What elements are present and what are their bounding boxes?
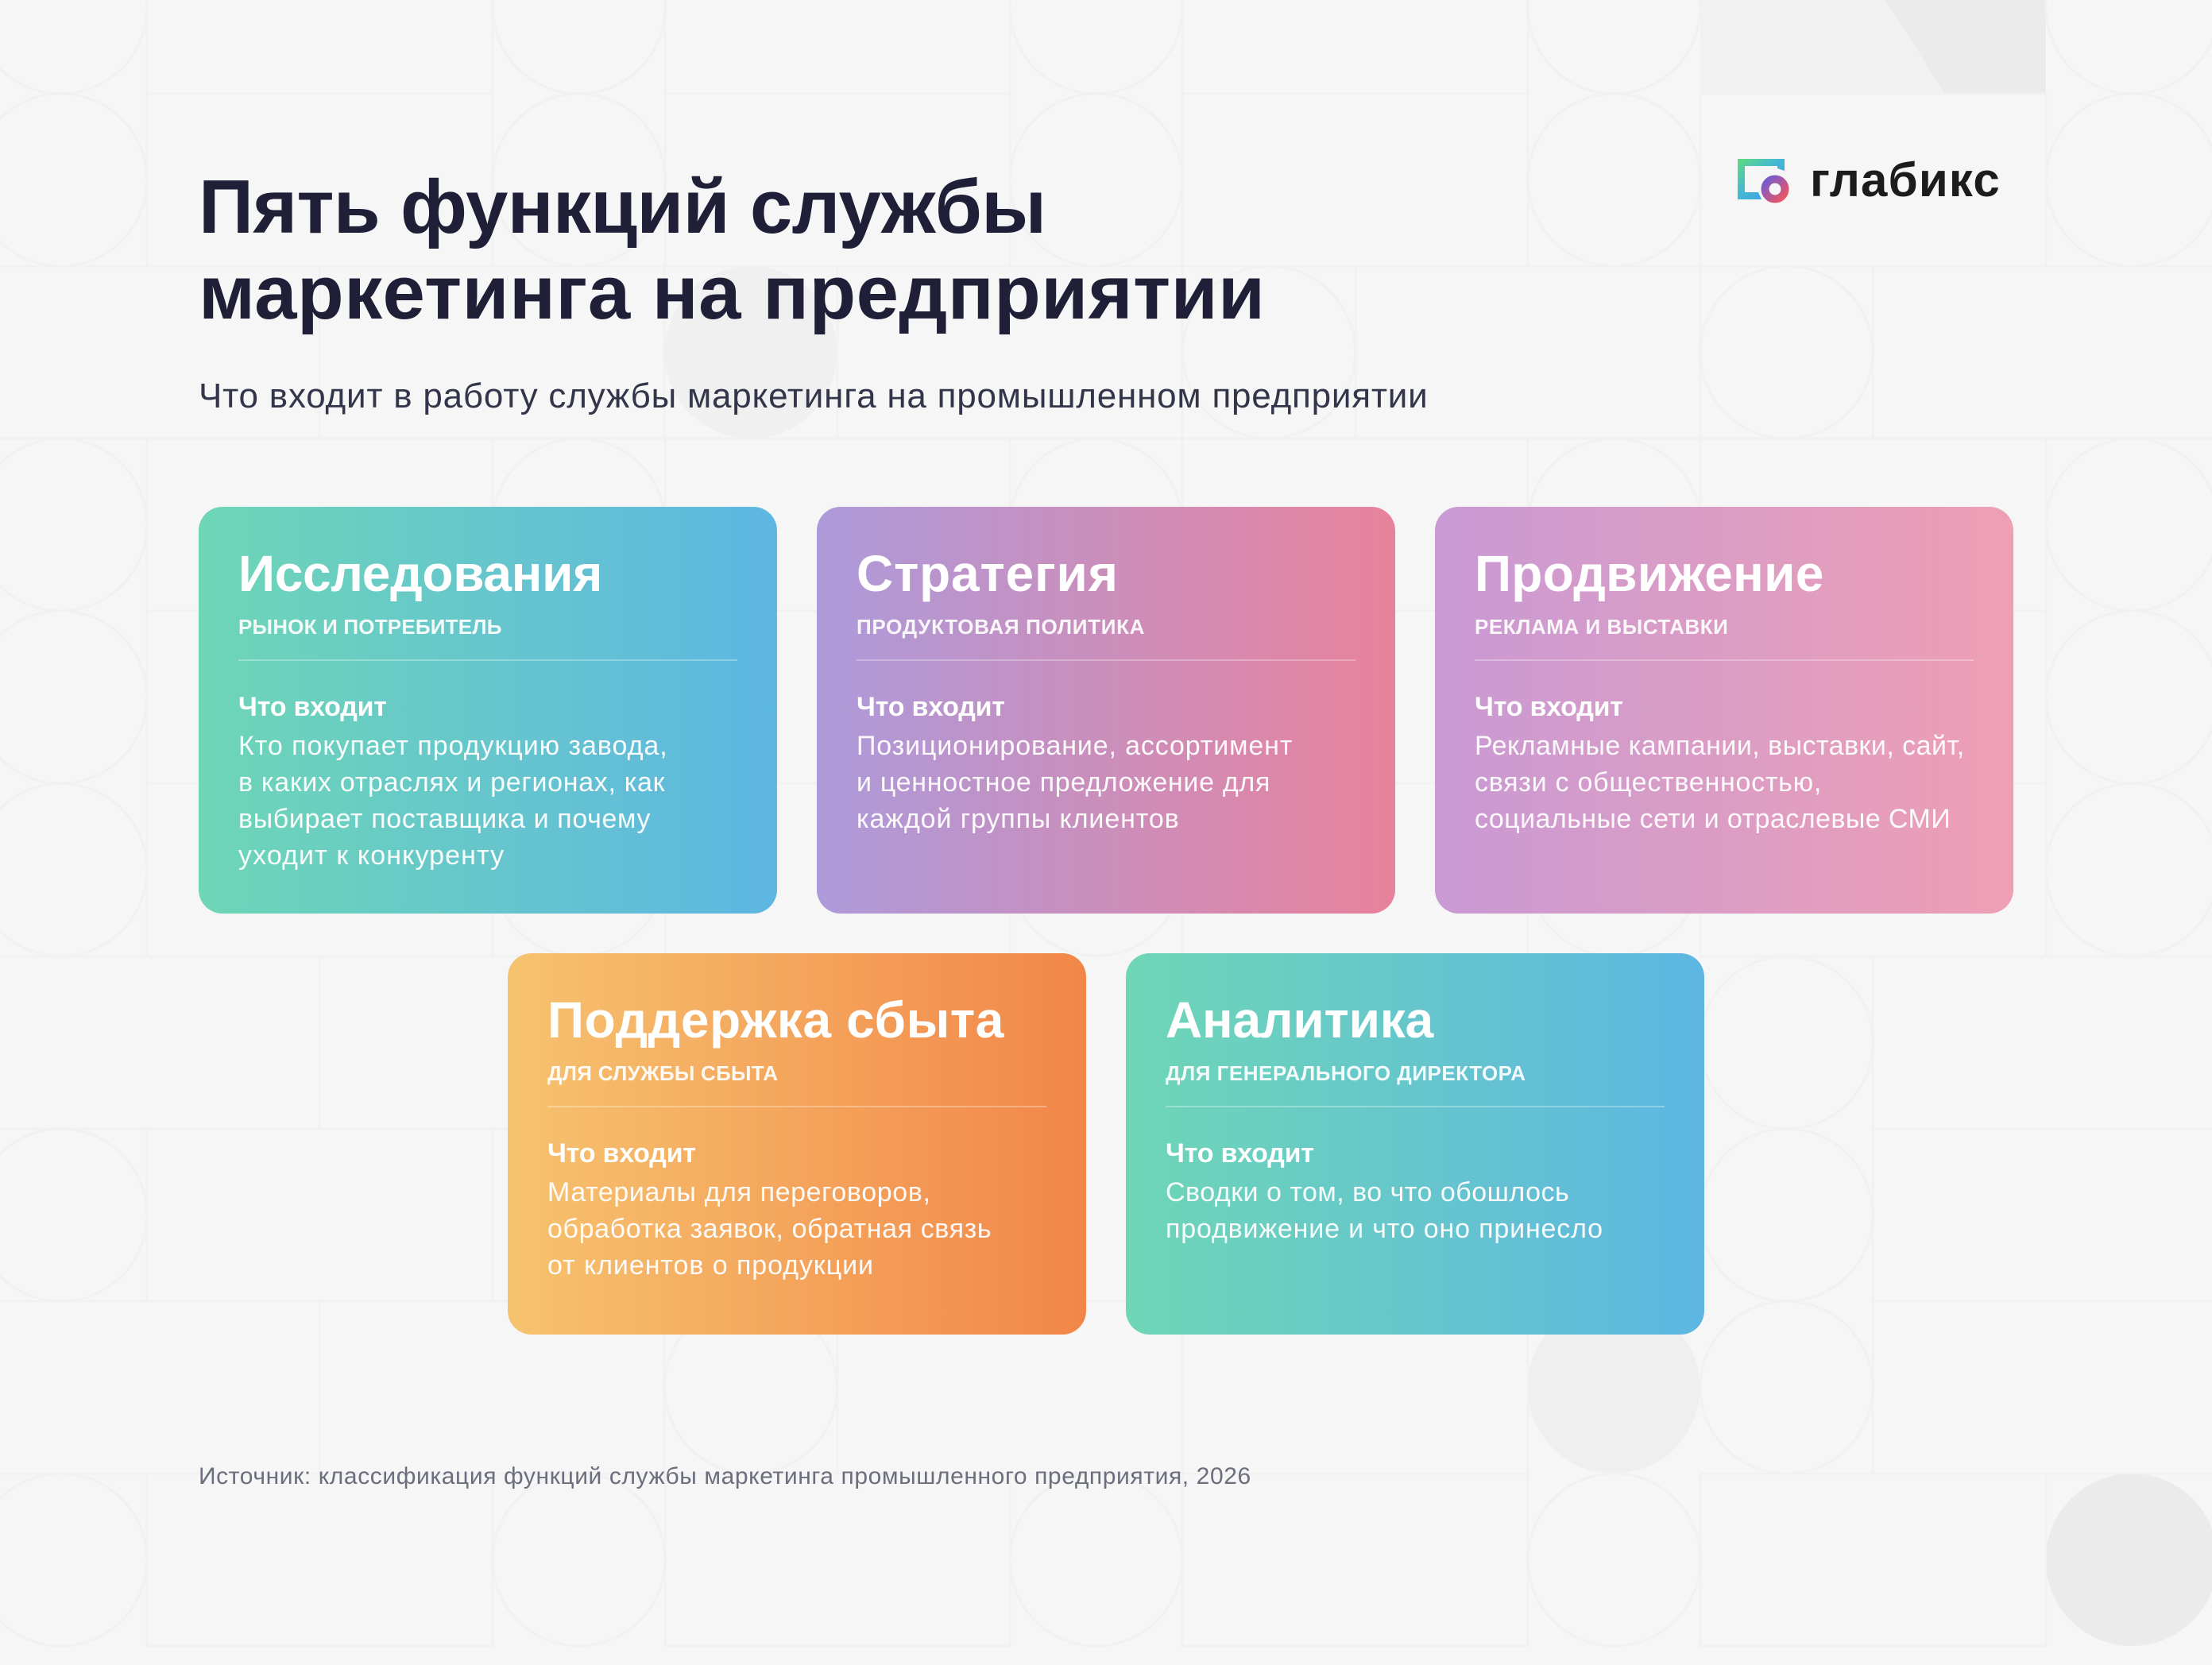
card text: от клиентов о продукции — [547, 1250, 874, 1281]
card text: выбирает поставщика и почему — [238, 804, 651, 834]
card text: обработка заявок, обратная связь — [547, 1214, 992, 1244]
card heading: Поддержка сбыта — [547, 991, 1004, 1049]
card text: Сводки о том, во что обошлось — [1166, 1177, 1569, 1207]
card text: в каких отраслях и регионах, как — [238, 767, 665, 798]
card subheading: РЫНОК И ПОТРЕБИТЕЛЬ — [238, 615, 502, 639]
panel: strategy — [817, 507, 1395, 914]
source footnote: Источник: классификация функций службы маркетинга промышленного предприятия, 2026 — [199, 1463, 1251, 1489]
card label: Что входит — [547, 1138, 696, 1169]
panel: analytics — [1126, 953, 1704, 1335]
subtitle: Что входит в работу службы маркетинга на промышленном предприятии — [199, 377, 1429, 415]
card text: связи с общественностью, — [1475, 767, 1822, 798]
card label: Что входит — [238, 692, 387, 722]
logo wordmark: глабикс — [1810, 153, 2001, 207]
card subheading: ДЛЯ СЛУЖБЫ СБЫТА — [547, 1061, 778, 1085]
card heading: Стратегия — [857, 545, 1119, 602]
card text: уходит к конкуренту — [238, 840, 505, 871]
card subheading: ДЛЯ ГЕНЕРАЛЬНОГО ДИРЕКТОРА — [1166, 1061, 1526, 1085]
title: Пять функций службы — [199, 164, 1046, 249]
icon: logo mark — [1738, 159, 1789, 203]
card text — [238, 731, 668, 871]
card text: продвижение и что оно принесло — [1166, 1214, 1603, 1244]
card text — [857, 731, 1293, 834]
panel: research — [199, 507, 777, 914]
card heading: Исследования — [238, 545, 602, 602]
card text: Материалы для переговоров, — [547, 1177, 931, 1207]
card text: каждой группы клиентов — [857, 804, 1180, 834]
card subheading: ПРОДУКТОВАЯ ПОЛИТИКА — [857, 615, 1145, 639]
card heading: Аналитика — [1166, 991, 1433, 1049]
panel: promotion — [1435, 507, 2013, 914]
card label: Что входит — [1475, 692, 1623, 722]
panel: sales support — [508, 953, 1086, 1335]
card label: Что входит — [1166, 1138, 1314, 1169]
card text: социальные сети и отраслевые СМИ — [1475, 804, 1951, 834]
card text: Кто покупает продукцию завода, — [238, 731, 668, 761]
card text — [1166, 1177, 1603, 1244]
logo: glabix — [1738, 153, 2001, 207]
card text: Позиционирование, ассортимент — [857, 731, 1293, 761]
card text — [547, 1177, 992, 1281]
card label: Что входит — [857, 692, 1005, 722]
title: маркетинга на предприятии — [199, 250, 1265, 335]
card text: Рекламные кампании, выставки, сайт, — [1475, 731, 1965, 761]
card text — [1475, 731, 1965, 834]
title — [199, 164, 1265, 335]
card heading: Продвижение — [1475, 545, 1824, 602]
card text: и ценностное предложение для — [857, 767, 1270, 798]
card subheading: РЕКЛАМА И ВЫСТАВКИ — [1475, 615, 1728, 639]
